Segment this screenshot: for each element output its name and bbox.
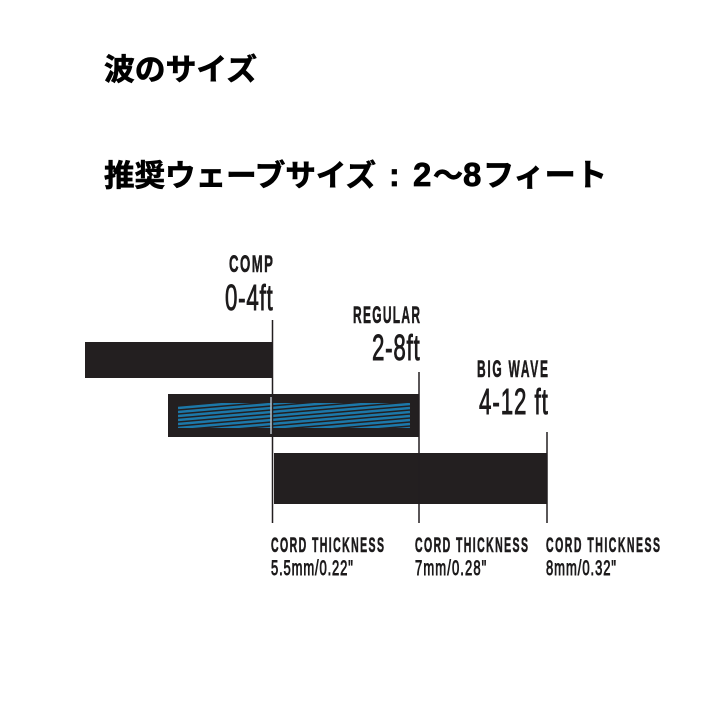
bar: regular with cord detail: [168, 394, 418, 437]
cord thickness: regular: [415, 533, 528, 580]
cord hatch: [178, 403, 410, 428]
bar: big wave: [274, 453, 547, 504]
heading: recommended wave size: フィート: [483, 158, 607, 193]
label: big wave: 4-12 ft: [479, 383, 548, 422]
heading: wave size: 波のサイズ: [104, 53, 257, 87]
heading: recommended wave size: :: [389, 157, 400, 193]
label: big wave: [477, 357, 548, 422]
marker line: comp: [271, 320, 272, 523]
heading: recommended wave size: 推奨ウェーブサイズ: [104, 159, 376, 193]
cord thickness: regular: CORD THICKNESS: [415, 533, 528, 557]
heading: recommended wave size: [104, 156, 607, 193]
bar: comp: [85, 342, 273, 378]
marker line: big wave: [546, 432, 548, 523]
cord thickness: comp: [271, 533, 384, 580]
label: comp: 0-4ft: [225, 279, 273, 318]
heading: recommended wave size: 8: [463, 156, 481, 193]
label: comp: [225, 251, 273, 318]
chart: leash size ranges: [85, 320, 547, 523]
marker line: regular: [418, 372, 420, 523]
cord thickness: comp: 5.5mm/0.22": [271, 556, 353, 580]
cord thickness: big wave: [546, 533, 660, 580]
cord thickness: big wave: CORD THICKNESS: [546, 533, 660, 557]
label: comp: COMP: [229, 251, 273, 278]
label: big wave: BIG WAVE: [477, 357, 548, 383]
label: regular: [353, 303, 420, 368]
heading: recommended wave size: 2: [413, 156, 431, 193]
label: regular: 2-8ft: [372, 329, 420, 368]
cord thickness: comp: CORD THICKNESS: [271, 533, 384, 557]
cord thickness: regular: 7mm/0.28": [415, 556, 486, 580]
label: regular: REGULAR: [353, 303, 420, 329]
cord thickness: big wave: 8mm/0.32": [546, 556, 616, 580]
heading: recommended wave size: 〜: [433, 160, 463, 193]
